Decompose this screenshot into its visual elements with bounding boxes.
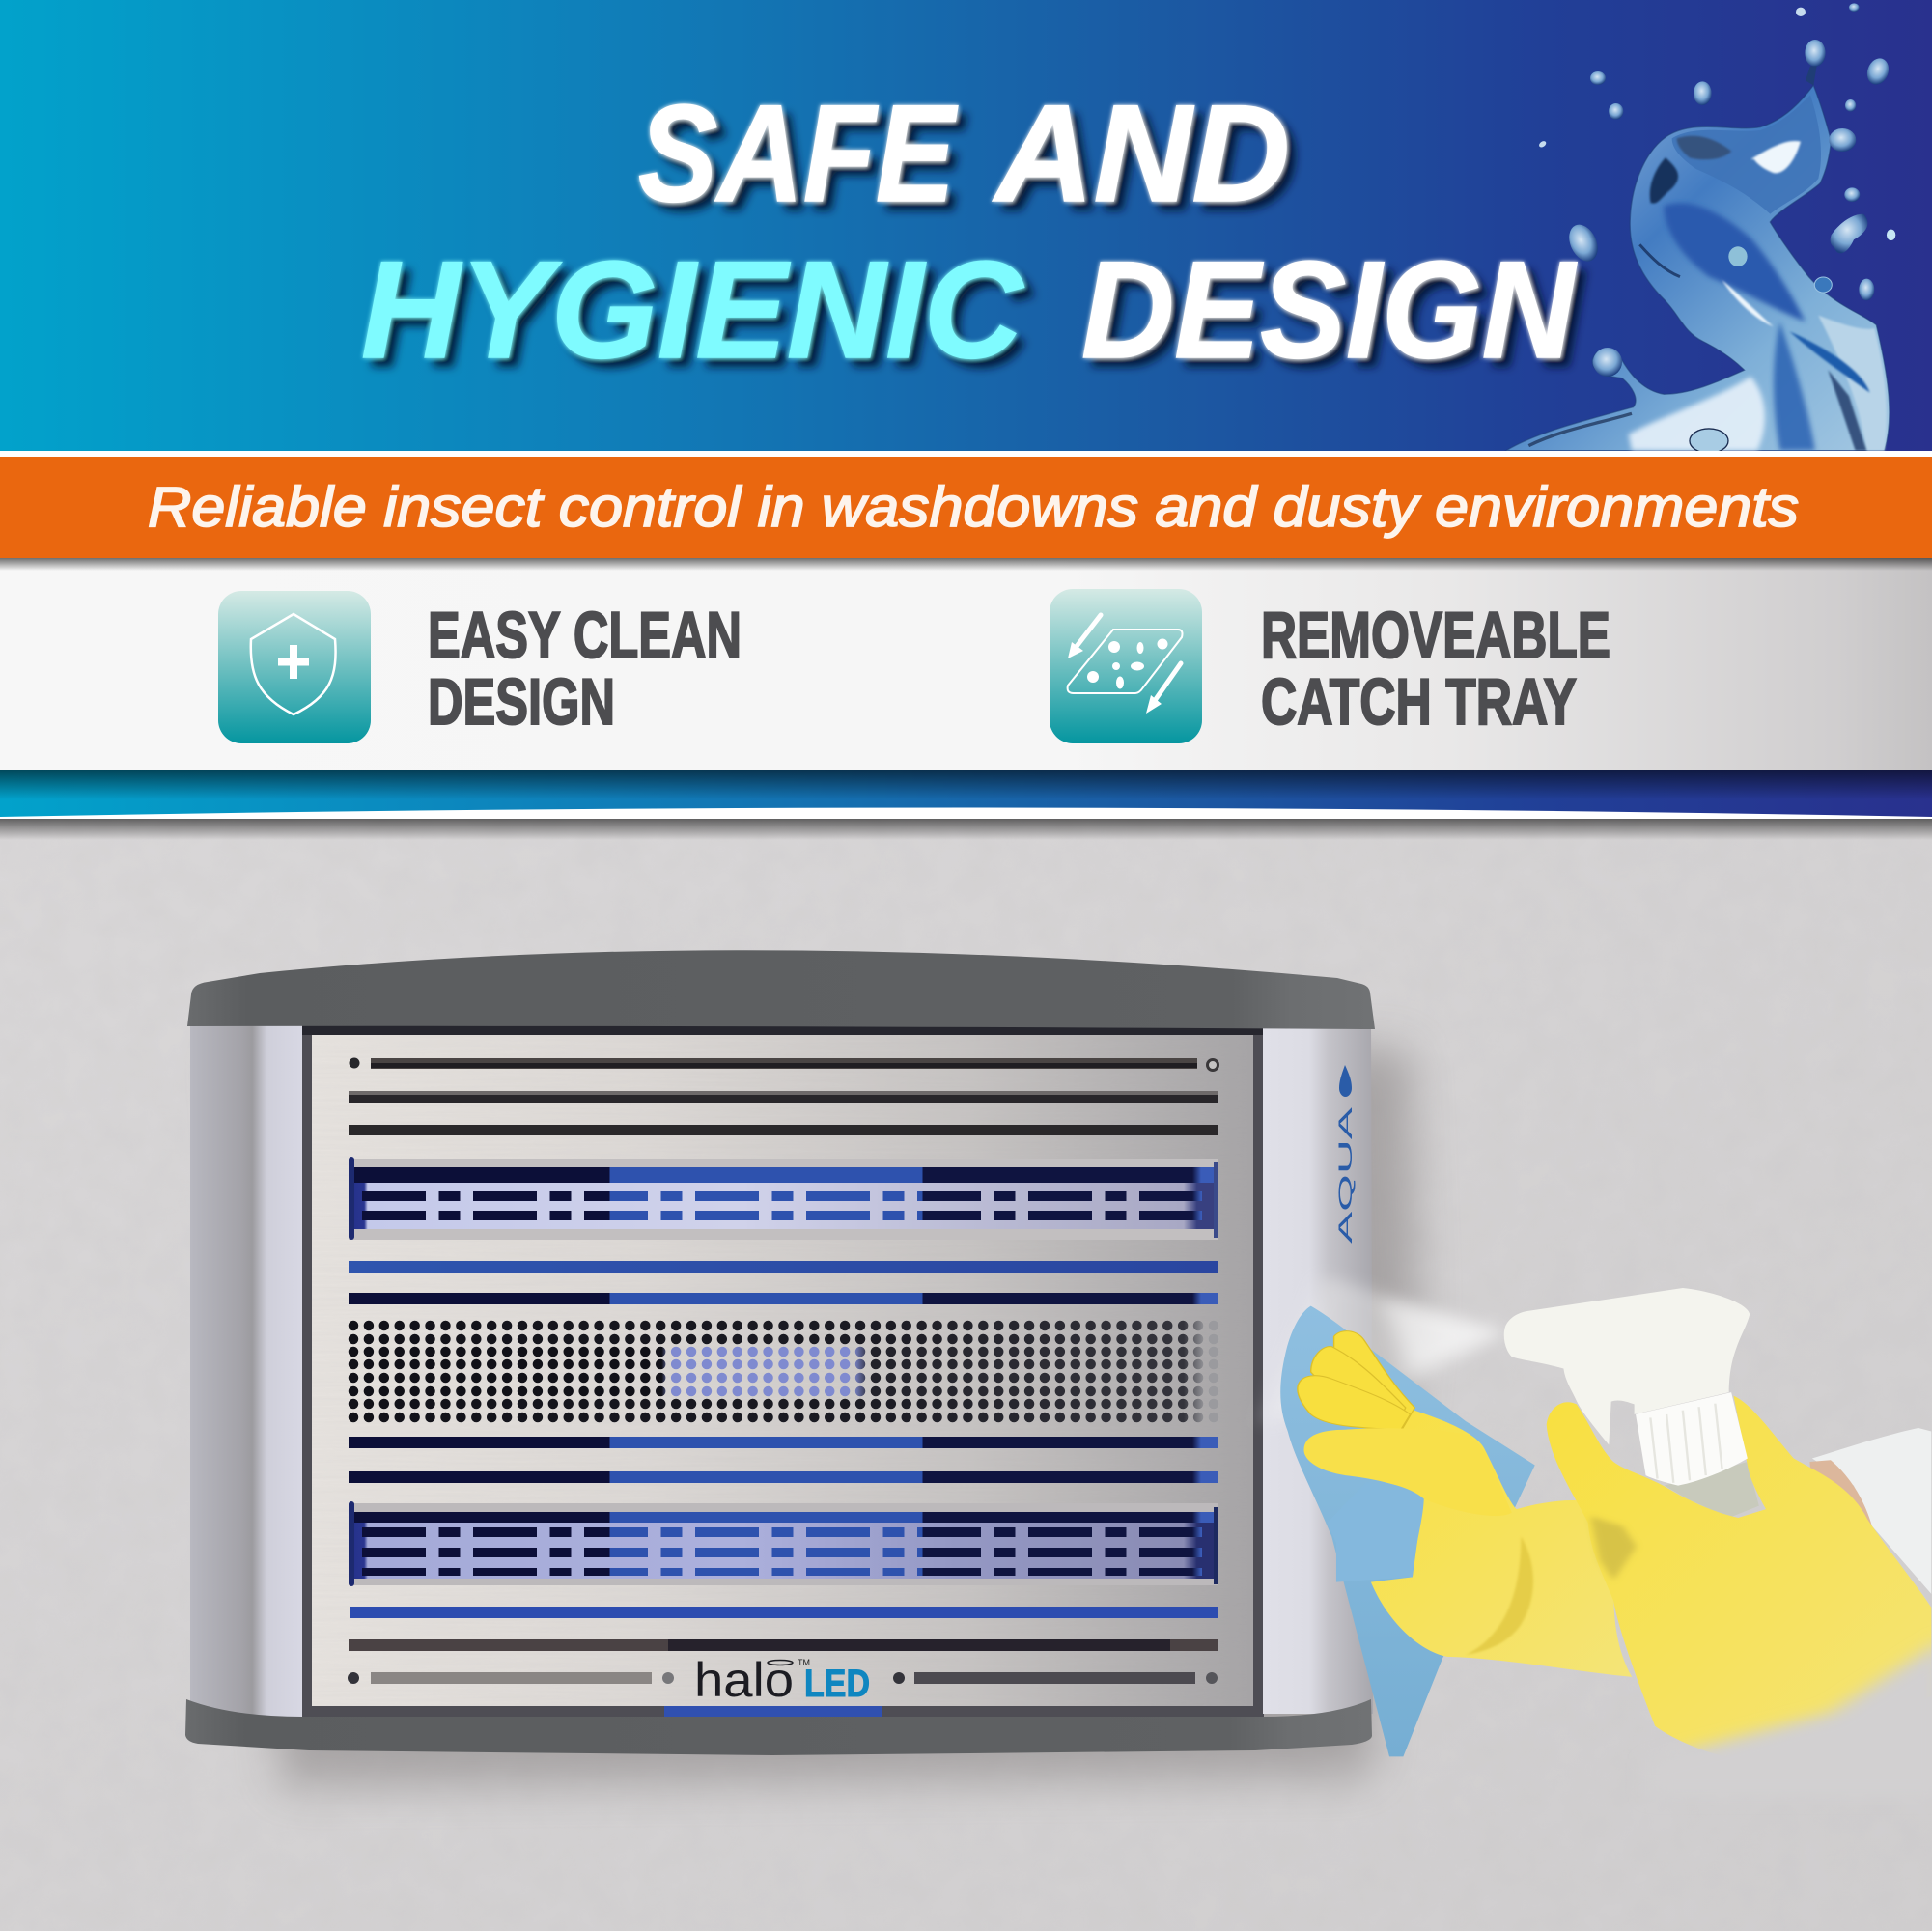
- orange tagline bar: [0, 451, 1932, 558]
- glove fade: [1650, 1638, 1932, 1797]
- left side column: [190, 1019, 303, 1719]
- logo: halo LED: LED: [804, 1663, 870, 1705]
- inner dark body: [302, 1023, 1264, 1719]
- logo: halo LED: [694, 1653, 870, 1707]
- top gap shadow: [302, 1025, 1264, 1035]
- heading: removeable catch tray: REMOVEABLE: [1261, 599, 1610, 672]
- glove shading: [1590, 1516, 1637, 1581]
- blue bars lower: [349, 1437, 1218, 1483]
- aqua label: AQUA: [1336, 1106, 1357, 1244]
- heading: removeable catch tray: [1261, 599, 1610, 739]
- top slots: [349, 1058, 1218, 1135]
- wall background: [0, 811, 1932, 1931]
- cloth fold: [1327, 1482, 1424, 1582]
- logo: halo LED: halo: [694, 1653, 794, 1707]
- title: safe and: AND: [993, 77, 1290, 231]
- sprayer collar: [1636, 1392, 1748, 1486]
- blue footer band: [0, 770, 1932, 840]
- glove: left palm and forearm: [1346, 1408, 1632, 1677]
- bottom cap: [185, 1699, 1372, 1755]
- front metal panel: [312, 1035, 1253, 1707]
- lower light louver: [349, 1501, 1218, 1586]
- bottle: [1665, 1462, 1759, 1518]
- heading: removeable catch tray: CATCH TRAY: [1261, 665, 1577, 739]
- aqua label: [1336, 1065, 1357, 1244]
- insect control unit: [185, 950, 1419, 1786]
- top cap: [187, 950, 1375, 1029]
- icon: shield: [218, 591, 371, 743]
- blue bars upper: [349, 1261, 1218, 1304]
- spray mist: [1262, 1275, 1505, 1424]
- perforated dot grid: [353, 1326, 1215, 1417]
- right side column: [1263, 1019, 1373, 1714]
- cleaning hands with cloth and spray bottle: [1262, 1275, 1932, 1797]
- sprayer head: [1504, 1288, 1750, 1445]
- features panel: [0, 558, 1932, 770]
- title: safe and: [638, 77, 1290, 231]
- glove: left thumb: [1303, 1428, 1512, 1516]
- blue glow strip under panel: [664, 1706, 882, 1717]
- glove: right hand: [1547, 1396, 1931, 1756]
- title: design: DESIGN: [1081, 234, 1578, 387]
- icon: catch tray: [1050, 589, 1202, 743]
- upper light louver: [349, 1157, 1218, 1240]
- water splash: [1506, 3, 1895, 453]
- header banner: [0, 0, 1932, 453]
- heading: easy clean design: DESIGN: [428, 665, 615, 739]
- left glove shading: [1466, 1536, 1533, 1655]
- heading: easy clean design: [428, 599, 742, 739]
- sleeve: [1812, 1428, 1931, 1594]
- unit shadow: [227, 1048, 1419, 1786]
- glove: left fingers: [1298, 1331, 1414, 1431]
- heading: easy clean design: EASY CLEAN: [428, 599, 742, 672]
- tagline: Reliable insect control in washdowns and dusty environments: [148, 476, 1799, 539]
- cloth: [1280, 1306, 1535, 1756]
- bottom slots: [348, 1607, 1218, 1684]
- title: safe and: SAFE: [638, 77, 958, 231]
- wrist: [1809, 1460, 1874, 1536]
- title: hygienic: HYGIENIC: [361, 234, 1024, 387]
- logo: halo LED: TM: [798, 1658, 810, 1667]
